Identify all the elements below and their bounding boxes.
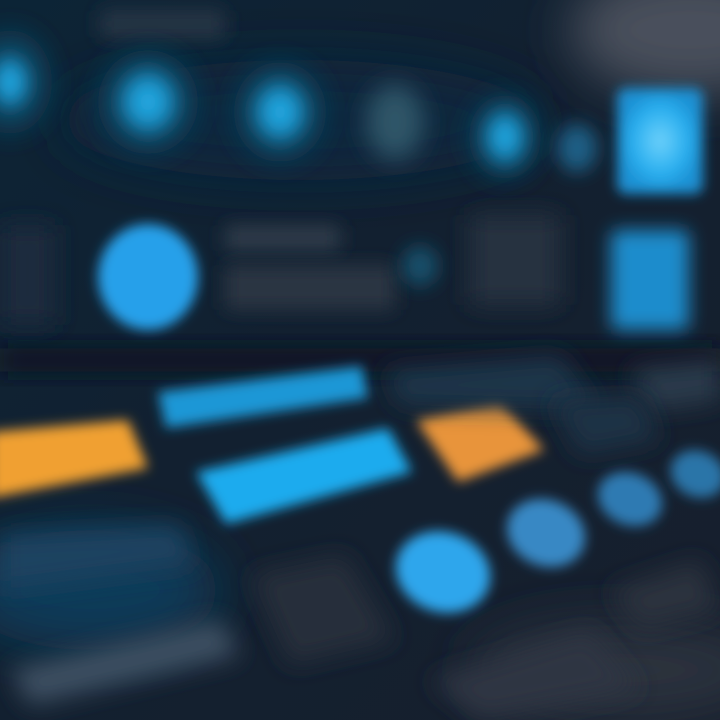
faint heading bar [100, 10, 225, 38]
faint row right [630, 360, 720, 410]
panel: middle row [0, 215, 560, 330]
far right block [610, 560, 720, 630]
panel: bottom left text blur [0, 525, 720, 720]
dot 5 [469, 95, 541, 179]
text block blur [225, 265, 395, 310]
dot 6 [557, 124, 597, 172]
dot 1 [0, 30, 52, 134]
oval 4 [663, 442, 720, 506]
icon: lower blue square [611, 230, 689, 330]
dot 4 [366, 84, 424, 160]
oval 2 [497, 487, 595, 579]
text block blur [470, 215, 560, 305]
left faint block [0, 225, 55, 325]
bottom dark strip [250, 555, 395, 665]
dot 3 [234, 62, 326, 162]
orange bar left [0, 420, 148, 498]
small teal dot [402, 246, 438, 286]
oval 1 [385, 519, 501, 625]
icon: large bright square [617, 88, 703, 194]
orange bar right [416, 402, 544, 482]
faint block right of orange [550, 395, 660, 455]
faint dark row [385, 355, 600, 410]
blue bar upper [158, 366, 368, 428]
text bar [0, 525, 195, 590]
blue bar lower [196, 428, 412, 524]
text bar [10, 620, 240, 705]
dot 2 [98, 50, 198, 154]
bottom right block [430, 630, 640, 720]
oval 3 [590, 463, 670, 535]
text block blur [225, 225, 340, 251]
panel: top row of status dots [0, 10, 597, 179]
panel: lower bars [0, 355, 720, 524]
panel: bottom ovals [385, 442, 720, 625]
icon: large blue circle [98, 224, 198, 330]
